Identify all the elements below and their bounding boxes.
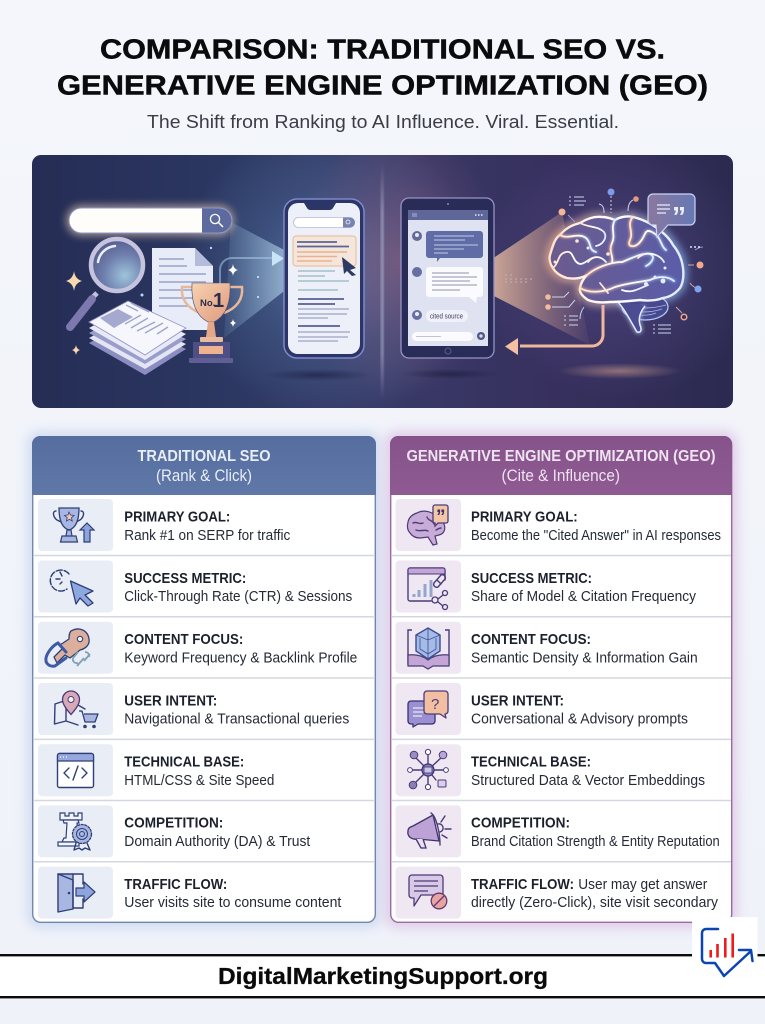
- brain data nodes: [505, 188, 704, 333]
- text: geo traffic flow: User may get answer: [578, 877, 707, 893]
- arrow: result to phone: [220, 251, 284, 284]
- bubble: ai answer: [426, 267, 483, 303]
- text: user intent: USER INTENT:: [124, 693, 217, 709]
- icon: glowing brain: [550, 216, 683, 332]
- row: success metric: [38, 560, 352, 612]
- row: technical base: [38, 744, 274, 796]
- row: geo user intent: [396, 683, 688, 735]
- text: geo technical base: TECHNICAL BASE:: [471, 754, 591, 770]
- row: geo competition: [396, 805, 720, 857]
- text: technical base: [124, 754, 274, 789]
- phone shadow: [278, 370, 360, 380]
- phone: search results: [284, 199, 364, 358]
- text: traffic flow: TRAFFIC FLOW:: [124, 877, 227, 893]
- icon: trophy No.1: No.: [200, 298, 215, 309]
- icon: newspaper stack: [89, 301, 186, 375]
- title: [57, 34, 708, 100]
- arrow: brain to tablet: [505, 305, 603, 355]
- highlighted result: [293, 236, 356, 266]
- text: traffic flow: User visits site to consume content: [124, 895, 341, 911]
- icon: document: [152, 248, 213, 330]
- footer band: [0, 954, 765, 998]
- light beam to phone: [224, 222, 288, 338]
- text: geo competition: Brand Citation Strength & Entity Reputation: [471, 834, 720, 850]
- icon: door exit: [58, 874, 95, 912]
- panel header: geo: (Cite & Influence): [502, 467, 620, 485]
- row: competition: [38, 805, 310, 857]
- text: geo user intent: [471, 693, 688, 728]
- speech bubble with quote: ”: [672, 201, 686, 232]
- citation pill: [426, 310, 468, 322]
- text: primary goal: [124, 510, 290, 544]
- tablet shadow: [414, 370, 482, 378]
- row: traffic flow: [38, 867, 341, 919]
- text: traffic flow: [124, 877, 341, 911]
- panel header: traditional seo: [32, 436, 376, 495]
- text: geo technical base: Structured Data & Vector Embeddings: [471, 773, 705, 789]
- panel: traditional seo: [32, 436, 376, 922]
- speech bubble with quote: [648, 194, 695, 237]
- text: primary goal: PRIMARY GOAL:: [124, 510, 230, 526]
- bubble: user prompt: [426, 231, 483, 262]
- text: geo technical base: [471, 754, 705, 789]
- icon: network: [408, 749, 448, 790]
- icon: cursor click: [50, 570, 93, 606]
- panel header: traditional seo: TRADITIONAL SEO: [138, 448, 270, 465]
- icon: search bar: [66, 205, 234, 236]
- icon: brain with quote: ”: [436, 507, 446, 528]
- text: success metric: Click-Through Rate (CTR) & Sessions: [124, 589, 352, 605]
- row: primary goal: [38, 499, 290, 551]
- icon: trophy with arrow: [53, 508, 94, 542]
- text: geo competition: [471, 816, 720, 850]
- sparkles: [66, 247, 259, 355]
- icon: brain with quote: [407, 505, 448, 545]
- text: geo content focus: CONTENT FOCUS:: [471, 632, 591, 648]
- text: geo success metric: Share of Model & Citation Frequency: [471, 589, 697, 605]
- text: geo user intent: USER INTENT:: [471, 693, 564, 709]
- title: COMPARISON: TRADITIONAL SEO VS.: [100, 34, 665, 64]
- panel header: traditional seo: (Rank & Click): [156, 467, 252, 485]
- icon: chat question: [408, 691, 448, 727]
- brain floor glow: [564, 364, 676, 378]
- title: GENERATIVE ENGINE OPTIMIZATION (GEO): [57, 70, 708, 100]
- row: geo success metric: [396, 560, 697, 612]
- text: technical base: TECHNICAL BASE:: [124, 754, 244, 770]
- text: success metric: SUCCESS METRIC:: [124, 571, 246, 587]
- icon: trophy No.1: 1: [213, 290, 224, 312]
- icon: magnifying glass: [70, 239, 143, 327]
- panel header: geo: [390, 436, 732, 495]
- hero illustration panel: [32, 155, 733, 408]
- icon: cursor: [342, 257, 356, 276]
- icon: map pin and cart: [54, 691, 98, 728]
- text: competition: Domain Authority (DA) & Trust: [124, 834, 310, 850]
- text: content focus: [124, 632, 357, 666]
- text: geo traffic flow: TRAFFIC FLOW:: [471, 877, 574, 893]
- text: geo primary goal: PRIMARY GOAL:: [471, 510, 578, 526]
- row: geo technical base: [396, 744, 705, 796]
- text: competition: COMPETITION:: [124, 816, 223, 832]
- text: geo content focus: [471, 632, 698, 666]
- glow: geo panel: [385, 431, 737, 928]
- panel: generative engine optimization: [390, 436, 732, 922]
- text: success metric: [124, 571, 352, 605]
- text: geo primary goal: [471, 510, 721, 544]
- row: user intent: [38, 683, 349, 735]
- footer site name: DigitalMarketingSupport.org: [218, 963, 548, 989]
- text: content focus: Keyword Frequency & Backlink Profile: [124, 650, 357, 666]
- row: content focus: [38, 622, 357, 674]
- text: content focus: CONTENT FOCUS:: [124, 632, 243, 648]
- text: geo content focus: Semantic Density & Information Gain: [471, 650, 698, 666]
- tablet: ai chat: [401, 198, 494, 358]
- panel header: geo: GENERATIVE ENGINE OPTIMIZATION (GEO): [406, 448, 716, 465]
- icon: trophy No.1: [182, 283, 242, 363]
- text: geo traffic flow: directly (Zero-Click), site visit secondary: [471, 895, 719, 911]
- text: geo success metric: [471, 571, 697, 605]
- text: geo competition: COMPETITION:: [471, 816, 570, 832]
- text: competition: [124, 816, 310, 850]
- row: geo primary goal: [396, 499, 721, 551]
- icon: chat question: ?: [431, 696, 439, 713]
- text: geo success metric: SUCCESS METRIC:: [471, 571, 592, 587]
- text: geo user intent: Conversational & Advisory prompts: [471, 712, 688, 728]
- icon: open book with gem: [408, 628, 449, 669]
- text: user intent: Navigational & Transactional queries: [124, 712, 349, 728]
- divider glow: [381, 165, 384, 400]
- logo: [692, 917, 758, 996]
- text: geo primary goal: Become the "Cited Answer" in AI responses: [471, 528, 721, 544]
- icon: megaphone: [408, 813, 451, 848]
- text: technical base: HTML/CSS & Site Speed: [124, 773, 274, 789]
- row: geo content focus: [396, 622, 698, 674]
- icon: dashboard with link and share: [408, 568, 448, 610]
- text: geo traffic flow: [471, 877, 719, 911]
- subtitle: The Shift from Ranking to AI Influence. Viral. Essential.: [147, 111, 619, 132]
- icon: rook and badge: [58, 813, 92, 850]
- icon: code window: [58, 754, 94, 788]
- citation pill: cited source: [430, 312, 463, 320]
- icon: blocked chat: [409, 875, 447, 909]
- row: geo traffic flow: [396, 867, 719, 919]
- text: user intent: [124, 693, 349, 728]
- peach beam to tablet: [494, 214, 590, 344]
- glow: traditional seo panel: [27, 431, 381, 928]
- icon: key and link: [46, 629, 90, 666]
- text: primary goal: Rank #1 on SERP for traffic: [124, 528, 290, 544]
